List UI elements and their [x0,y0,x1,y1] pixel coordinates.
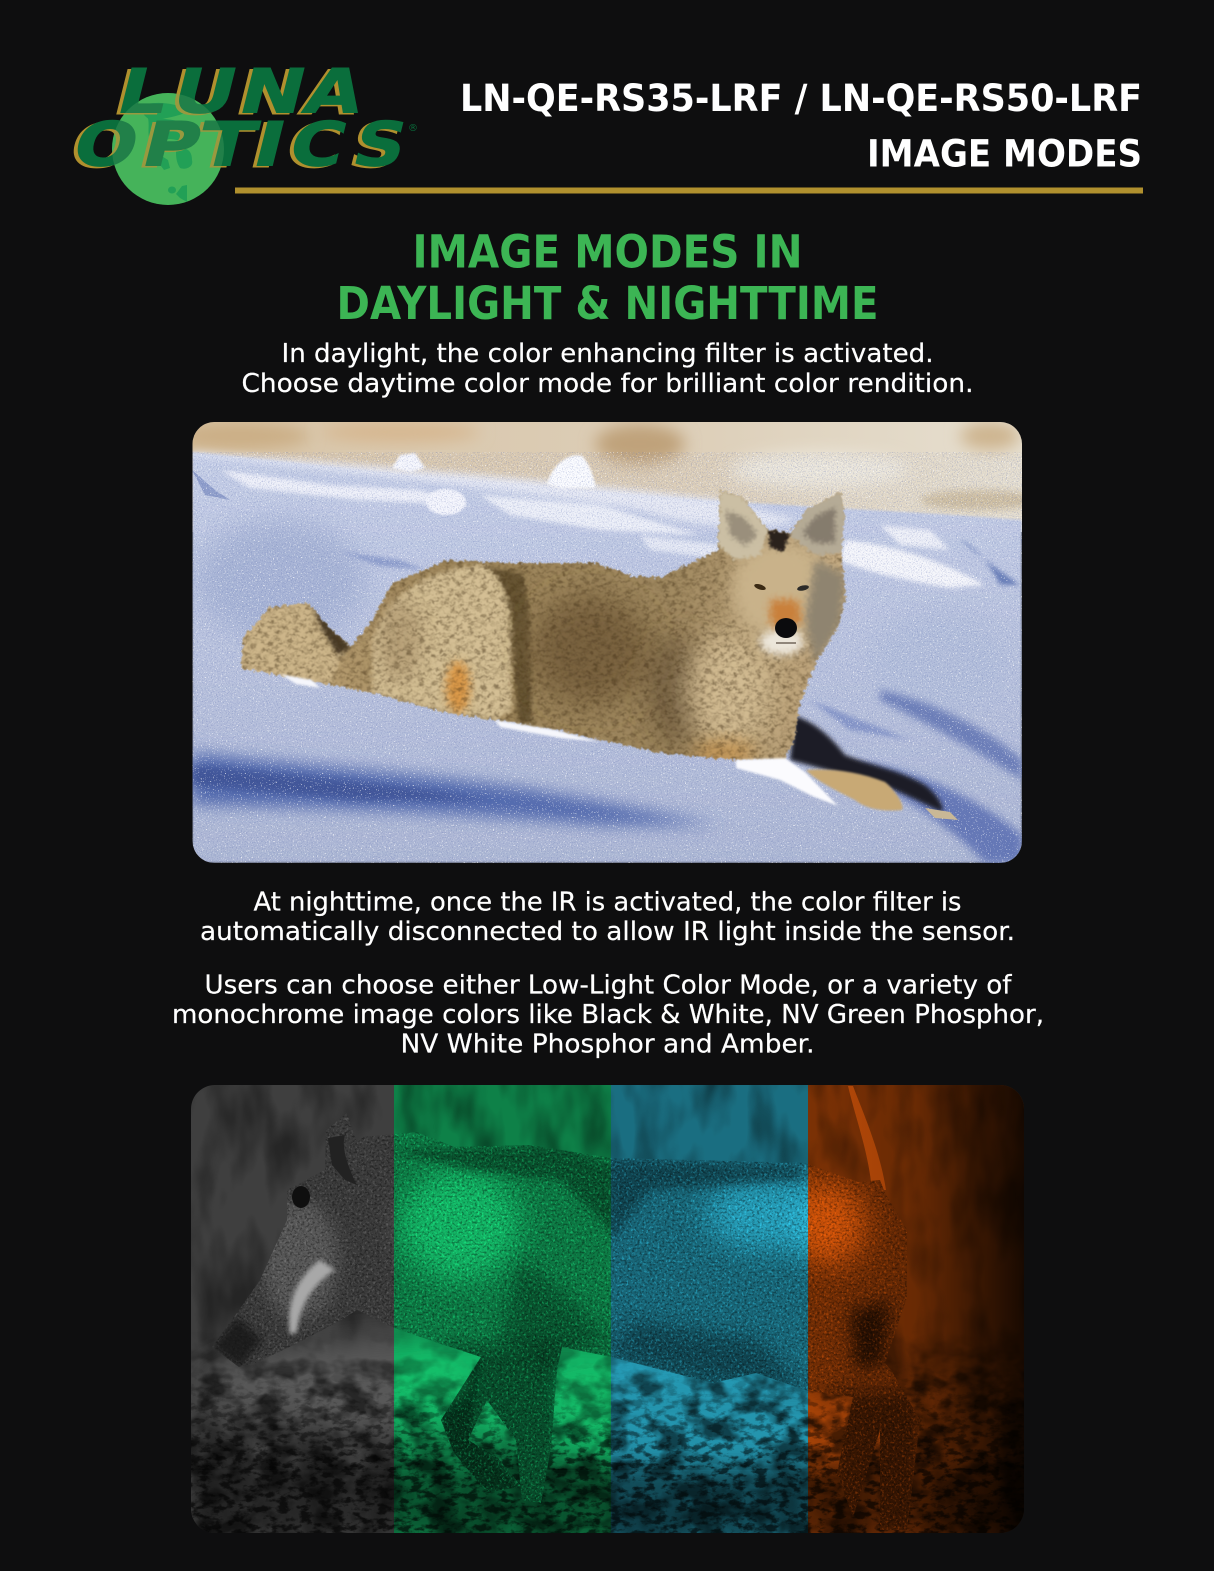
coyote eyes and nose [754,583,809,643]
text block: monochrome options [172,970,1044,1060]
logo word OPTICS [62,109,415,182]
registered mark: ® [408,123,418,134]
logo word OPTICS: C [278,112,350,182]
logo word LUNA: A [293,59,368,129]
coyote [241,490,851,770]
photo: coyote in daylight snow [170,422,1040,863]
logo: Luna Optics [74,68,417,205]
paw toes [925,808,958,820]
heading: image modes in daylight and nighttime [336,226,878,330]
globe translucent sheen over letters [112,93,224,205]
header title: LN-QE-RS35-LRF / LN-QE-RS50-LRF [460,77,1142,120]
text block: daylight description [242,339,974,399]
head [730,540,830,640]
logo word OPTICS: T [190,110,264,180]
text block: daylight description: Choose daytime color mode for brilliant color rendition. [242,369,974,399]
snow lip along coyote belly [280,674,838,806]
icon: green globe [112,93,224,205]
logo word LUNA: U [161,58,241,129]
text block: nighttime description [200,888,1015,947]
text block: monochrome options: monochrome image colors like Black & White, NV Green Phosphor, [172,1000,1044,1030]
logo word LUNA: A [297,57,372,128]
logo word OPTICS: C [282,110,354,181]
band: black and white mode [191,1085,394,1533]
hindquarter [372,565,513,720]
text block: monochrome options: NV White Phosphor and Amber. [400,1030,814,1060]
front paw [806,770,903,811]
dark rear leg [790,716,943,812]
logo word OPTICS: P [135,110,209,180]
logo word LUNA: U [165,57,245,127]
logo word OPTICS: S [346,109,415,180]
logo word OPTICS: I [242,111,290,181]
tail tone [241,603,345,685]
band: amber mode [808,1085,1024,1533]
logo word OPTICS: I [246,109,294,180]
logo word OPTICS: T [186,111,260,182]
band: white phosphor (teal) mode [611,1085,808,1533]
flank shading [530,595,650,705]
photo: warthog in four night modes [191,1085,1024,1535]
header title: IMAGE MODES [867,132,1142,176]
logo word OPTICS: S [342,110,411,182]
blurred background [170,422,1040,532]
heading: image modes in daylight and nighttime: IMAGE MODES IN [412,226,802,278]
text block: nighttime description: automatically disconnected to allow IR light inside the sensor. [200,917,1015,947]
text block: daylight description: In daylight, the color enhancing filter is activated. [282,339,934,369]
text block: monochrome options: Users can choose either Low-Light Color Mode, or a variety of [204,970,1013,1000]
logo word OPTICS: O [66,110,146,181]
band: green phosphor mode [394,1085,611,1533]
body [241,490,846,760]
logo word OPTICS: O [62,112,142,182]
ears [718,490,768,560]
logo word LUNA: L [110,57,177,127]
text block: nighttime description: At nighttime, once the IR is activated, the color filter is [254,888,962,918]
logo word LUNA [106,57,372,129]
logo word LUNA: N [228,58,310,129]
logo word OPTICS: P [131,111,205,182]
heading: image modes in daylight and nighttime: DAYLIGHT & NIGHTTIME [336,277,878,330]
logo word LUNA: N [232,57,314,127]
header title [460,77,1142,176]
logo word LUNA: L [106,58,173,129]
snow field [192,452,1022,863]
